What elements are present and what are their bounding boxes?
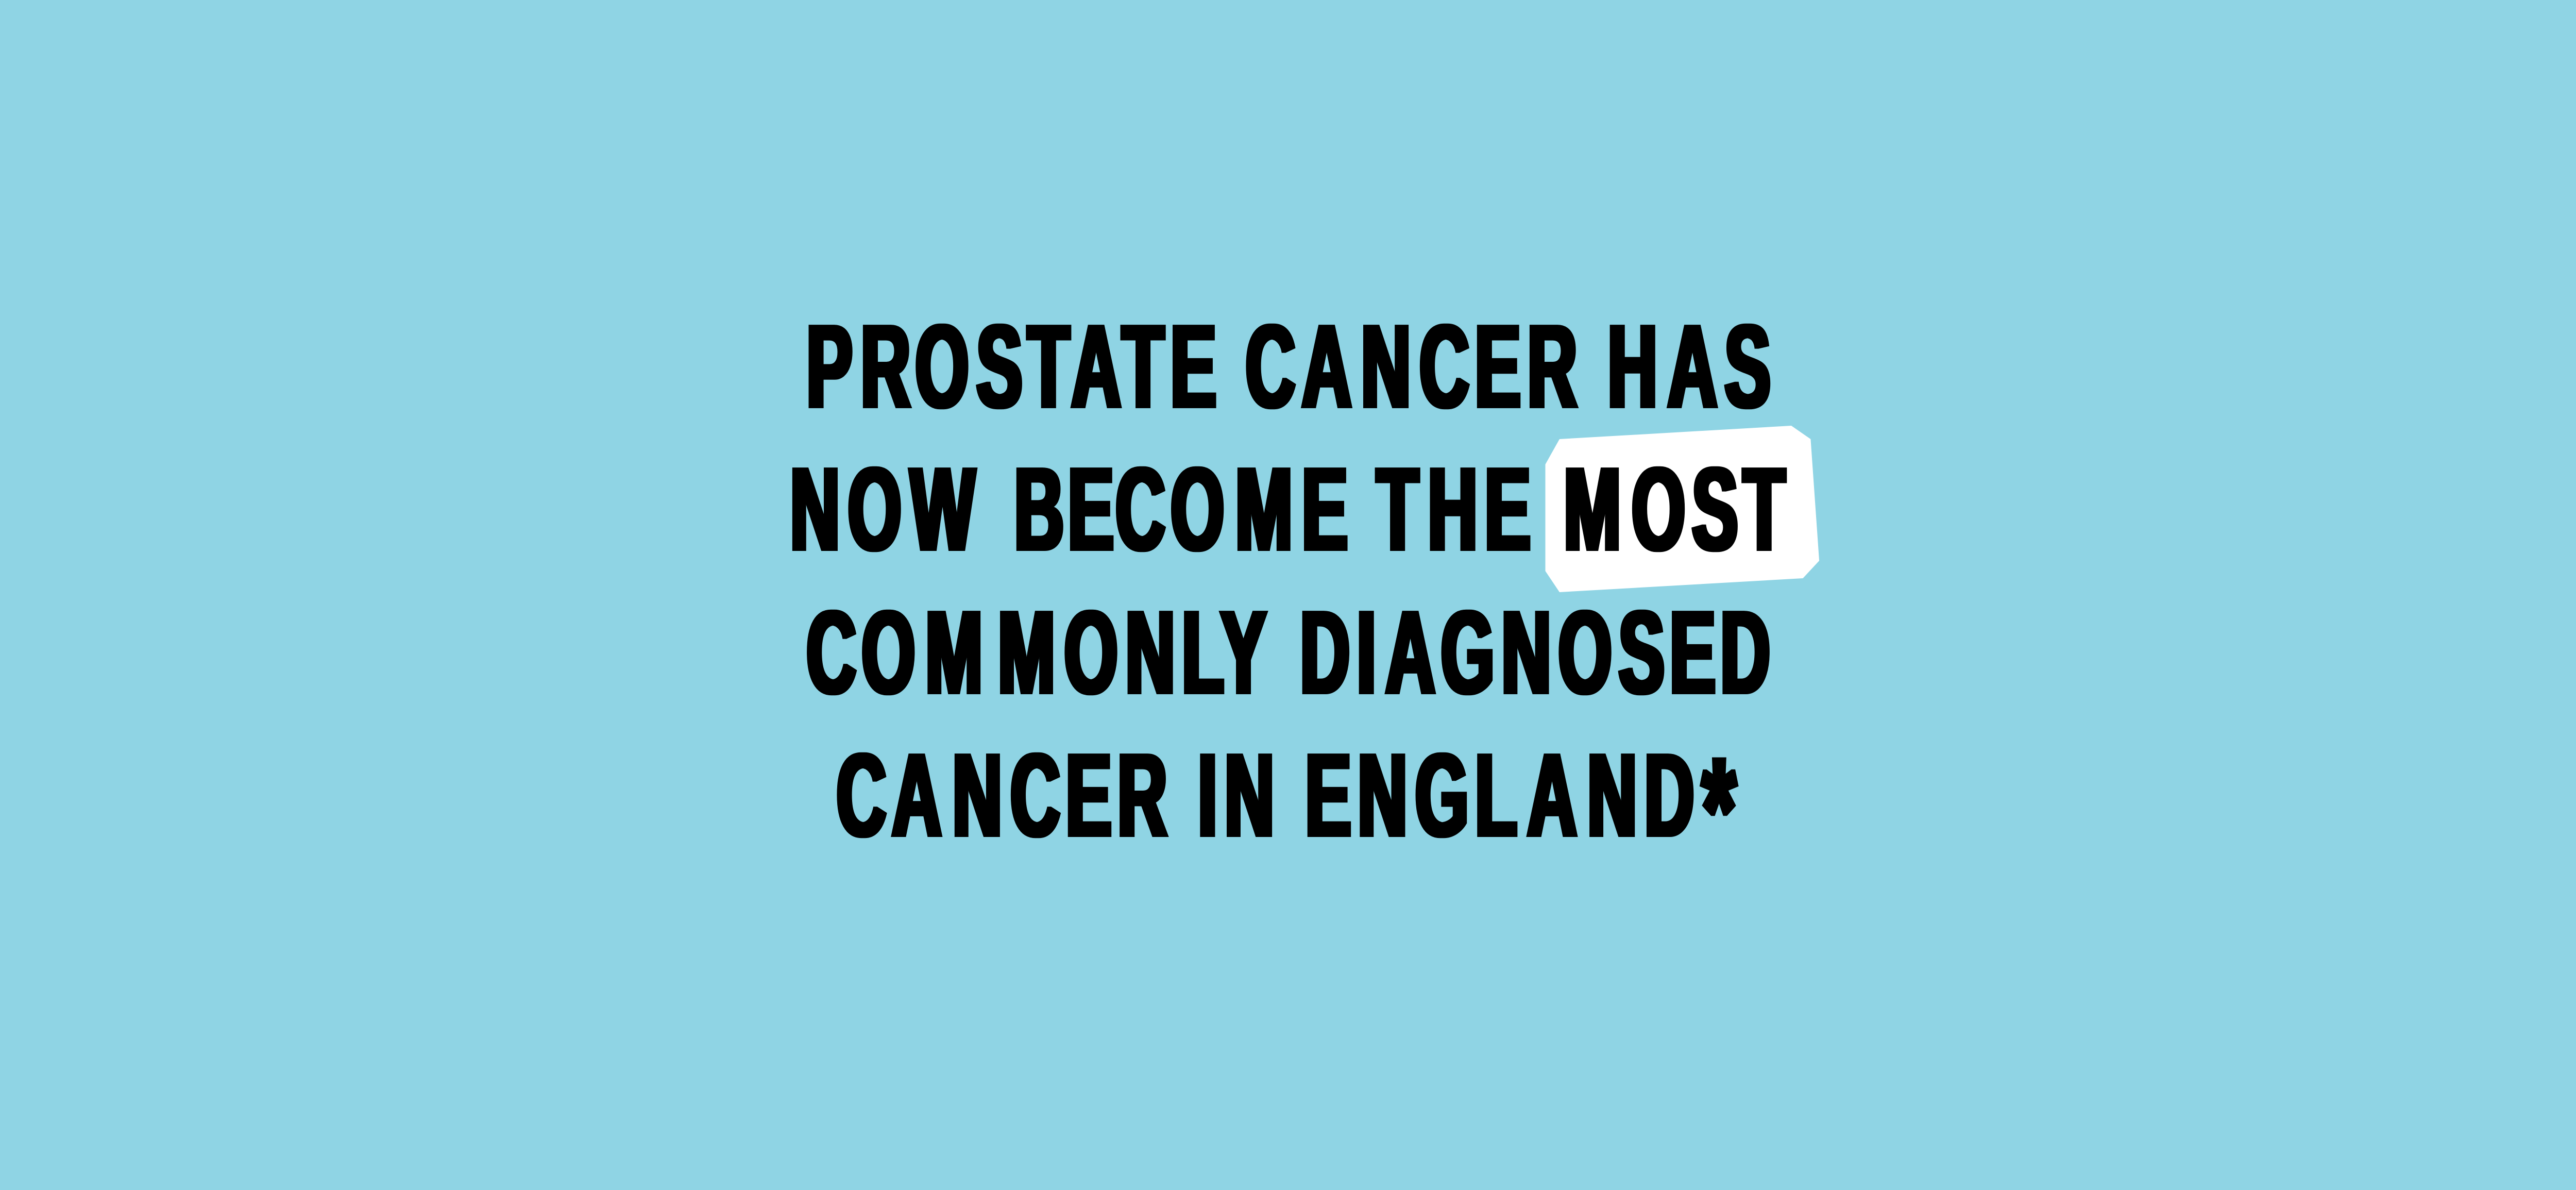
headline line 4: CANCER IN ENGLAND	[837, 729, 1694, 861]
headline line 1: PROSTATE CANCER HAS	[807, 300, 1770, 432]
headline line 3: COMMONLY DIAGNOSED	[807, 586, 1770, 718]
headline line 4: *	[1702, 727, 1736, 894]
headline statement	[790, 300, 1785, 894]
white highlight shape behind MOST	[1546, 426, 1819, 592]
headline line 2: NOW BECOME THE MOST	[790, 443, 1785, 575]
